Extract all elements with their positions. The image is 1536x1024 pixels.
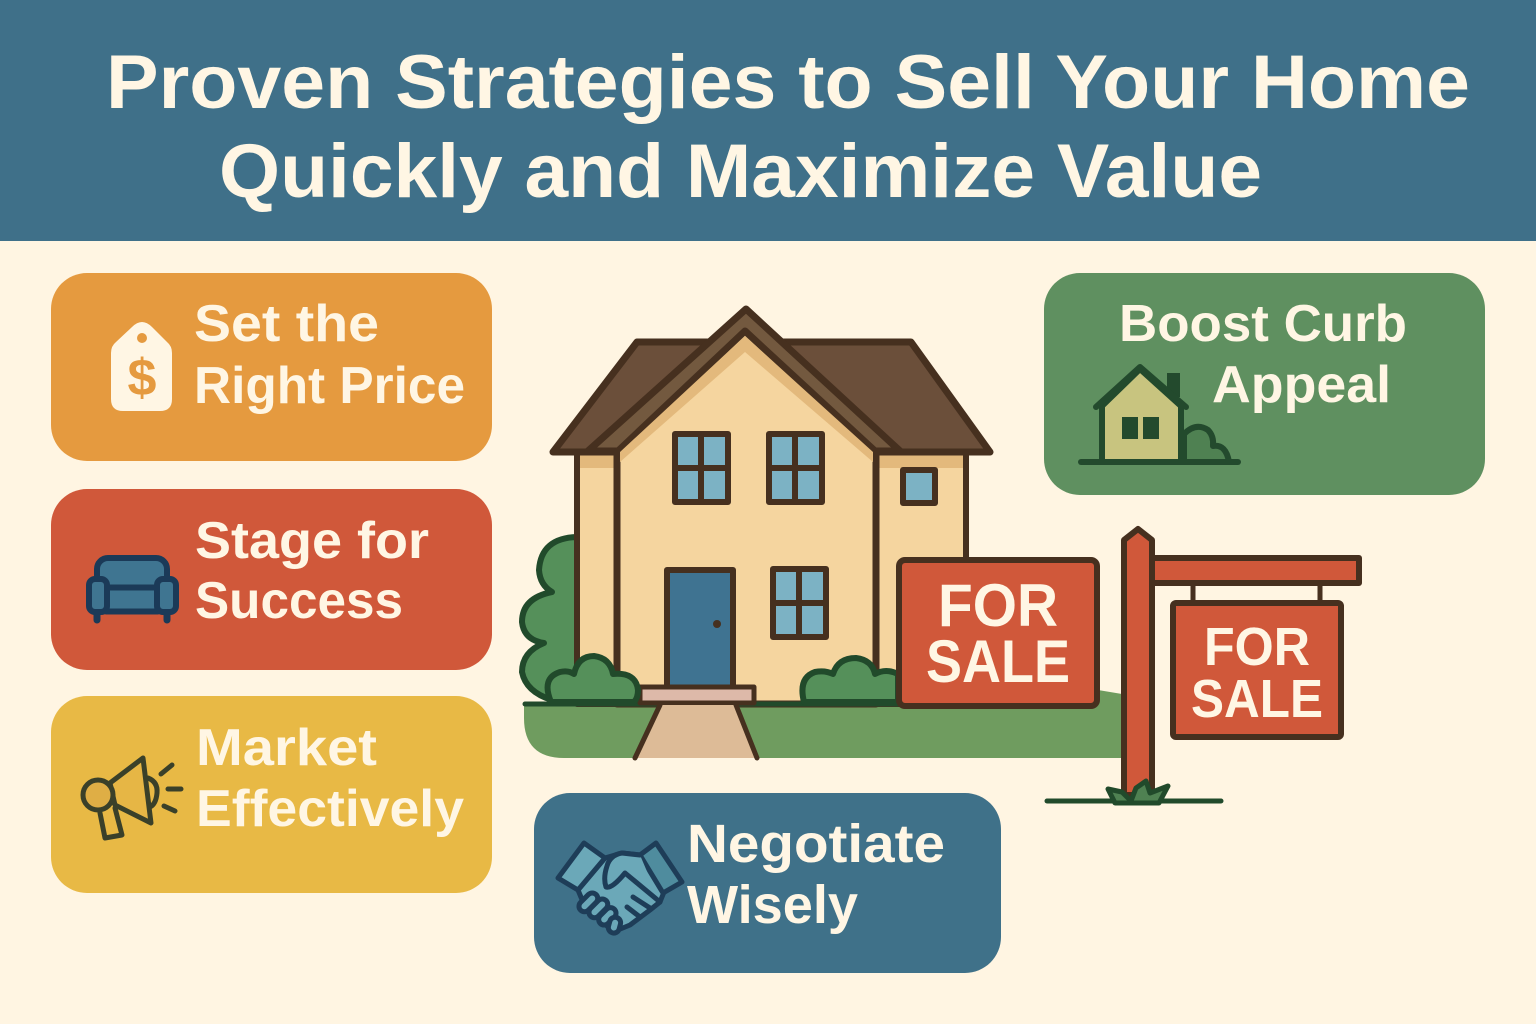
bush: front right bbox=[802, 658, 898, 702]
wall: wings bbox=[577, 452, 966, 704]
bush: tall left bbox=[522, 537, 577, 700]
walkway edges bbox=[635, 705, 757, 758]
icon: handshake bbox=[558, 843, 682, 934]
panel: boost curb appeal: Appeal bbox=[1212, 356, 1391, 414]
icon: price tag bbox=[111, 322, 172, 411]
bush: front left bbox=[548, 656, 638, 702]
illustration: house bbox=[522, 309, 990, 758]
panel: market effectively: Effectively bbox=[196, 780, 464, 838]
sign: large for sale bbox=[899, 560, 1097, 706]
hanging board bbox=[1173, 603, 1341, 737]
panel: negotiate wisely: Wisely bbox=[687, 875, 858, 935]
window: lower bbox=[773, 569, 826, 637]
panel: stage for success: Stage for bbox=[195, 512, 429, 570]
post bbox=[1124, 529, 1152, 795]
panel: boost curb appeal: Boost Curb bbox=[1119, 295, 1407, 353]
icon: megaphone bbox=[83, 758, 181, 838]
icon: price tag: $ bbox=[128, 349, 157, 407]
door bbox=[667, 570, 733, 688]
panel: set the right price bbox=[51, 273, 492, 461]
sign: large for sale: SALE bbox=[926, 628, 1070, 695]
panel: market effectively bbox=[51, 696, 492, 893]
sign: hanging post for sale bbox=[1047, 529, 1359, 803]
ground line bbox=[525, 702, 900, 706]
panel: negotiate wisely bbox=[534, 793, 1001, 973]
front step bbox=[640, 687, 754, 703]
window: small right bbox=[903, 470, 935, 503]
sign: large for sale: FOR bbox=[938, 572, 1058, 639]
wall: main gable bbox=[617, 331, 876, 704]
arm bbox=[1152, 558, 1359, 583]
title banner: Quickly and Maximize Value bbox=[219, 129, 1262, 214]
lawn bbox=[524, 690, 1122, 758]
window: upper left bbox=[675, 434, 728, 502]
gable shadow bbox=[620, 336, 873, 462]
icon: small house bbox=[1081, 367, 1238, 462]
hangers bbox=[1193, 585, 1320, 602]
panel: set the right price: Right Price bbox=[194, 357, 465, 415]
grass tuft bbox=[1108, 781, 1168, 803]
sign: hanging post for sale: SALE bbox=[1191, 669, 1323, 729]
panel: stage for success: Success bbox=[195, 572, 403, 630]
panel: market effectively: Market bbox=[196, 719, 377, 777]
title banner: Proven Strategies to Sell Your Home bbox=[106, 40, 1470, 125]
panel: negotiate wisely: Negotiate bbox=[687, 814, 945, 874]
sign: hanging post for sale: FOR bbox=[1204, 617, 1310, 677]
panel: boost curb appeal bbox=[1044, 273, 1485, 495]
walkway bbox=[635, 705, 757, 758]
window: upper right bbox=[769, 434, 822, 502]
eave shadows bbox=[580, 455, 963, 468]
roof: gable bbox=[588, 309, 900, 451]
ground line bbox=[1047, 798, 1221, 804]
panel: set the right price: Set the bbox=[194, 295, 379, 353]
title banner bbox=[0, 0, 1536, 241]
panel: stage for success bbox=[51, 489, 492, 670]
roof: main bbox=[553, 342, 990, 452]
icon: sofa bbox=[89, 558, 176, 620]
